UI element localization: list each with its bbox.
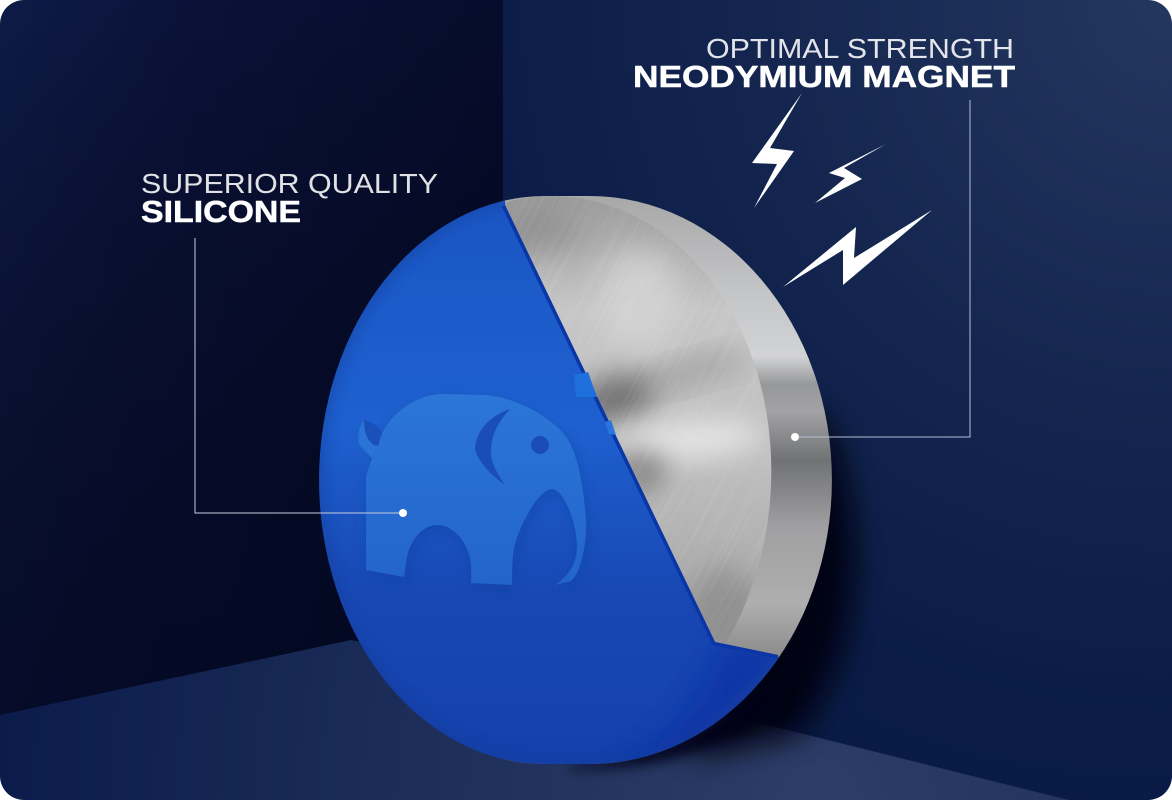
- callout: silicone: [141, 168, 438, 517]
- bolt 3: [783, 210, 932, 287]
- background: left wall: [0, 0, 504, 730]
- label: superior quality silicone: SILICONE: [141, 194, 301, 229]
- elephant ear: [475, 409, 510, 485]
- disc: magnet brushed face: [505, 196, 772, 640]
- disc: magnet side wall: [500, 190, 840, 770]
- background: right wall: [503, 0, 1172, 800]
- icon: embossed elephant: [358, 394, 588, 590]
- lightning bolts: [752, 93, 932, 287]
- bolt 1: [752, 93, 802, 208]
- leader line: silicone: [195, 238, 403, 513]
- leader dot: silicone: [399, 509, 407, 517]
- shadow behind disc: [570, 400, 855, 768]
- tabs on cut edge: [574, 372, 616, 435]
- label: optimal strength neodymium magnet: [635, 38, 1015, 88]
- bolt 2: [815, 144, 886, 203]
- label: superior quality silicone: SUPERIOR QUALITY: [141, 168, 438, 199]
- elephant tail: [358, 420, 378, 458]
- label: superior quality silicone: [142, 174, 438, 222]
- callout: magnet: [633, 33, 1015, 441]
- disc: blue silicone shell: [319, 200, 778, 764]
- label: optimal strength neodymium magnet: OPTIMAL STRENGTH: [706, 33, 1014, 64]
- elephant eye: [531, 436, 549, 454]
- leader line: magnet: [795, 100, 970, 437]
- leader dot: magnet: [791, 433, 799, 441]
- label: optimal strength neodymium magnet: NEODYMIUM MAGNET: [633, 59, 1015, 94]
- background: floor: [0, 640, 1069, 800]
- silicone cut edge: [505, 205, 777, 655]
